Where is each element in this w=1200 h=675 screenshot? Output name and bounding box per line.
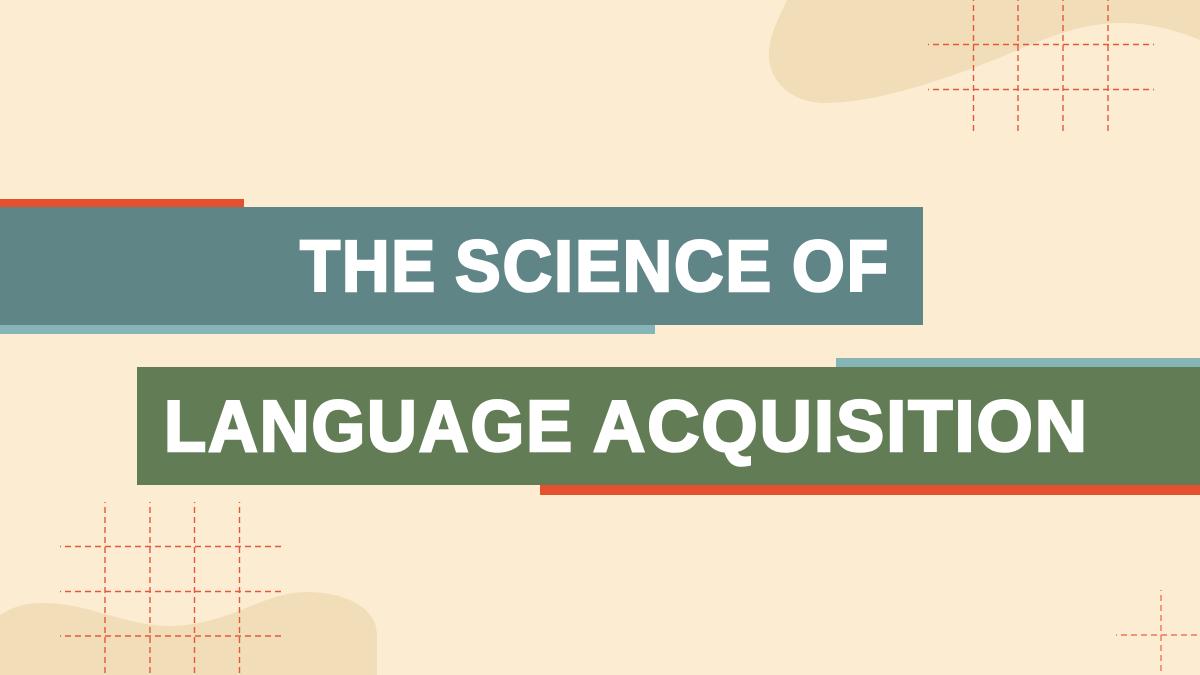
top-right blob — [769, 0, 1200, 103]
heading band: The Science Of: THE — [300, 226, 437, 307]
heading band: Language Acquisition: ACQUISITION — [593, 386, 1089, 467]
heading band: Language Acquisition: LANGUAGE — [164, 386, 574, 467]
heading band: The Science Of: SCIENCE — [455, 226, 773, 307]
light teal accent bar, bottom band — [836, 358, 1200, 367]
red accent bar, top band — [0, 199, 244, 209]
heading band: Language Acquisition — [137, 367, 1200, 485]
top-right dashed grid — [928, 0, 1154, 135]
red accent bar, bottom band — [540, 485, 1200, 495]
heading band: The Science Of — [0, 207, 923, 325]
bottom-left dashed grid — [60, 502, 285, 675]
bottom-left blob — [0, 592, 377, 675]
heading band: The Science Of: OF — [792, 226, 890, 307]
light teal accent bar, top band — [0, 325, 655, 334]
bottom-right dashed cross — [1116, 590, 1200, 675]
